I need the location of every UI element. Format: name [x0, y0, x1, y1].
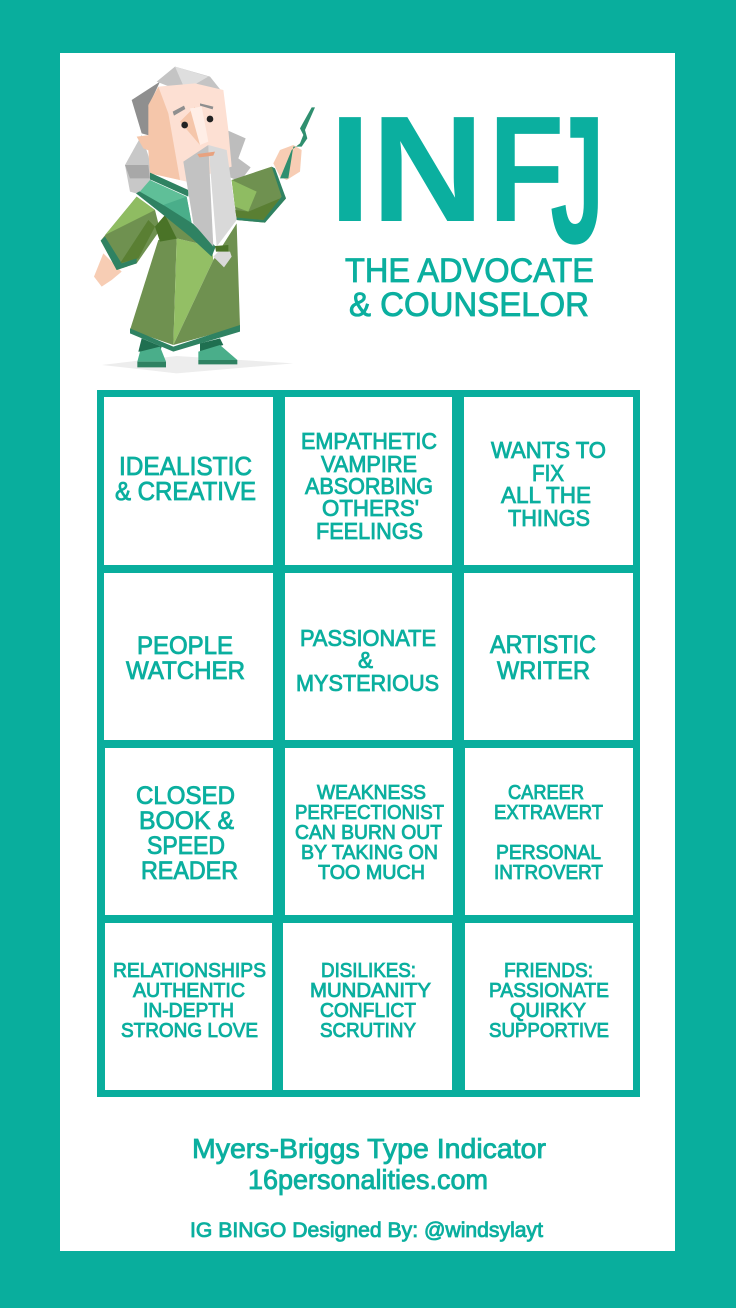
cell: empathetic vampire: FEELINGS: [316, 518, 423, 544]
cell: passionate and mysterious: [285, 573, 452, 740]
cell: career and personal: [465, 748, 633, 915]
cell: relationships: AUTHENTIC: [133, 980, 245, 1002]
white panel: [60, 53, 675, 1251]
icon: wizard character: [94, 67, 315, 373]
cell: weakness: [285, 748, 453, 915]
cell: closed book: [105, 748, 273, 915]
cell: career and personal: CAREER: [508, 782, 584, 804]
cell: empathetic vampire: EMPATHETIC: [301, 428, 437, 454]
footer source text: [192, 1133, 546, 1195]
cell: career and personal: PERSONAL: [496, 842, 601, 864]
subtitle: THE ADVOCATE: [345, 252, 594, 290]
cell: passionate and mysterious: &: [358, 647, 373, 673]
cell: closed book: READER: [141, 857, 238, 885]
cell: closed book: BOOK &: [139, 807, 234, 835]
cell: weakness: TOO MUCH: [318, 862, 425, 884]
cell: artistic writer: [464, 573, 633, 740]
cell: relationships: RELATIONSHIPS: [113, 960, 266, 982]
cell: friends: QUIRKY: [510, 1000, 586, 1022]
cell: dislikes: MUNDANITY: [310, 980, 431, 1002]
cell: passionate and mysterious: MYSTERIOUS: [296, 670, 439, 696]
title: INFJ: I: [329, 84, 371, 253]
subtitle: [345, 252, 594, 324]
cell: people watcher: WATCHER: [126, 657, 245, 685]
cell: dislikes: CONFLICT: [320, 1000, 416, 1022]
cell: empathetic vampire: OTHERS': [322, 495, 419, 521]
subtitle: & COUNSELOR: [349, 286, 589, 324]
cell: people watcher: PEOPLE: [137, 632, 233, 660]
cell: dislikes: DISILIKES:: [321, 960, 416, 982]
cell: weakness: WEAKNESS: [317, 782, 426, 804]
cell: wants to fix: WANTS TO: [491, 437, 606, 463]
bingo grid: [97, 390, 640, 1097]
cell: idealistic: & CREATIVE: [115, 476, 256, 506]
cell: relationships: STRONG LOVE: [121, 1020, 258, 1042]
cell: empathetic vampire: ABSORBING: [305, 473, 433, 499]
cell: artistic writer: ARTISTIC: [490, 631, 596, 659]
cell: career and personal: INTROVERT: [494, 862, 603, 884]
cell: empathetic vampire: VAMPIRE: [321, 451, 417, 477]
title: INFJ: F: [489, 84, 564, 253]
footer source text: Myers-Briggs Type Indicator: [192, 1133, 546, 1164]
cell: wants to fix: [464, 397, 633, 565]
title: INFJ: [329, 77, 605, 282]
cell: career and personal: EXTRAVERT: [494, 802, 603, 824]
cell: idealistic: [104, 397, 273, 565]
cell: passionate and mysterious: PASSIONATE: [300, 625, 436, 651]
cell: closed book: CLOSED: [136, 782, 235, 810]
cell: dislikes: [283, 923, 452, 1090]
cell: closed book: SPEED: [147, 832, 225, 860]
cell: friends: SUPPORTIVE: [489, 1020, 609, 1042]
cell: dislikes: SCRUTINY: [320, 1020, 416, 1042]
title: INFJ: J: [550, 77, 605, 282]
cell: wants to fix: THINGS: [508, 505, 590, 531]
cell: people watcher: [104, 573, 273, 740]
cell: relationships: [105, 923, 272, 1090]
cell: wants to fix: ALL THE: [501, 482, 591, 508]
cell: friends: [465, 923, 633, 1090]
footer source text: 16personalities.com: [248, 1164, 488, 1195]
cell: weakness: BY TAKING ON: [301, 842, 438, 864]
title: INFJ: N: [371, 84, 484, 253]
cell: idealistic: IDEALISTIC: [119, 451, 252, 481]
cell: wants to fix: FIX: [532, 460, 564, 486]
cell: friends: PASSIONATE: [489, 980, 609, 1002]
cell: artistic writer: WRITER: [497, 657, 590, 685]
cell: weakness: PERFECTIONIST: [295, 802, 444, 824]
cell: relationships: IN-DEPTH: [143, 1000, 234, 1022]
cell: empathetic vampire: [285, 397, 452, 565]
cell: weakness: CAN BURN OUT: [295, 822, 442, 844]
footer credit: IG BINGO Designed By: @windsylayt: [190, 1219, 543, 1242]
cell: friends: FRIENDS:: [504, 960, 593, 982]
